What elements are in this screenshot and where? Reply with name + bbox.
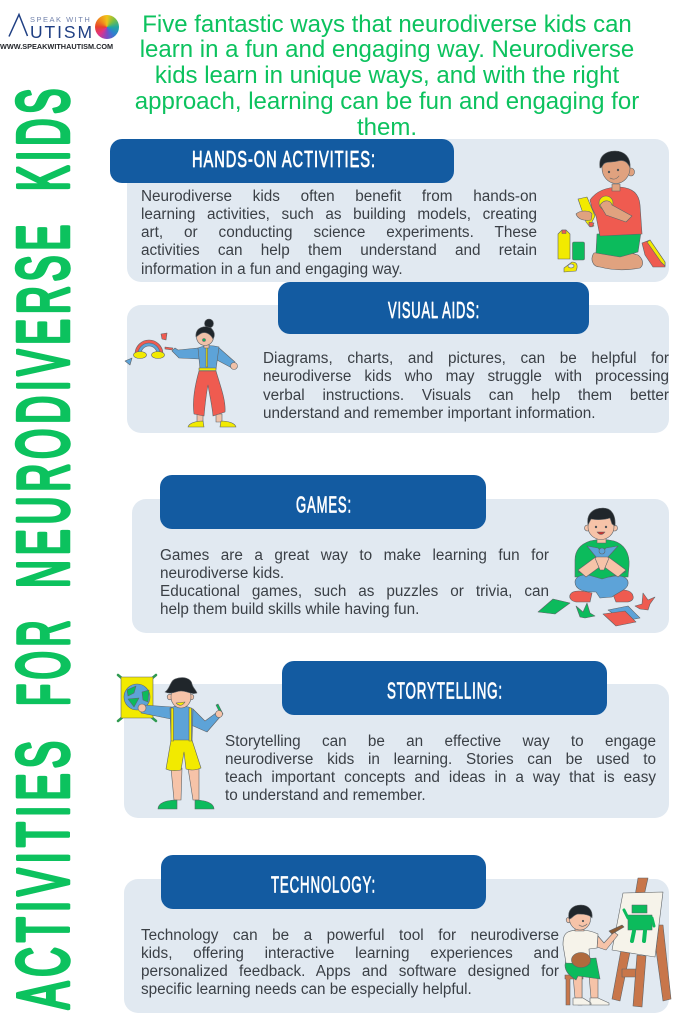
heading: visual aids: VISUAL AIDS: — [388, 297, 480, 323]
body text: specific learning needs can be especially helpful. — [141, 981, 472, 998]
panel background — [127, 139, 669, 282]
logo text: utism: UTISM — [30, 22, 94, 42]
body text: kids, offering interactive learning experiences and — [141, 945, 559, 962]
panel background — [127, 305, 669, 433]
logo: Speak With Autism — [0, 12, 119, 51]
body text: neurodiverse kids. — [160, 565, 284, 582]
logo text: speak with: SPEAK WITH — [30, 15, 91, 24]
body text — [141, 188, 537, 278]
body text: Games are a great way to make learning fun for — [160, 546, 549, 564]
intro text: approach, learning can be fun and engaging for — [135, 88, 639, 115]
body text: neurodiverse kids who may struggle with processing — [263, 368, 669, 385]
icon: boy folding origami — [538, 508, 656, 626]
body text — [160, 546, 549, 618]
intro text: kids learn in unique ways, and with the right — [155, 62, 619, 89]
intro text: Five fantastic ways that neurodiverse kids can — [142, 10, 632, 38]
vertical title — [4, 84, 84, 1010]
body text: verbal instructions. Visuals can help them better — [263, 386, 669, 404]
heading: technology: TECHNOLOGY: — [271, 872, 376, 898]
heading: visual aids — [278, 282, 589, 334]
body text: Educational games, such as puzzles or trivia, can — [160, 583, 549, 600]
panel: storytelling — [116, 661, 669, 818]
body text: to understand and remember. — [225, 787, 426, 804]
body text — [141, 926, 559, 998]
panel background — [132, 499, 669, 633]
body text: Technology can be a powerful tool for neurodiverse — [141, 926, 559, 944]
vertical title: FOR — [4, 616, 84, 706]
body text — [225, 732, 656, 804]
panel: visual aids — [124, 282, 669, 433]
heading: storytelling: STORYTELLING: — [387, 678, 503, 704]
body text: Storytelling can be an effective way to engage — [225, 732, 656, 750]
body text: personalized feedback. Apps and software designed for — [141, 963, 559, 980]
heading: hands-on activities — [110, 139, 454, 183]
body text — [263, 350, 669, 422]
icon: boy painting robot on easel — [562, 878, 672, 1008]
heading: storytelling — [282, 661, 607, 715]
body text: activities can help them understand and retain — [141, 242, 537, 259]
icon: girl with rainbow — [124, 318, 238, 428]
panel background — [124, 879, 669, 1013]
heading: games — [160, 475, 486, 529]
body text: understand and remember important information. — [263, 405, 595, 422]
body text: learning activities, such as building models, creating — [141, 206, 537, 223]
body text: Neurodiverse kids often benefit from hands-on — [141, 188, 537, 204]
icon: boy with globe poster — [116, 674, 224, 810]
icon: rainbow badge — [95, 15, 119, 39]
icon: boy with glue bottle — [558, 150, 666, 272]
icon: logo letter A — [8, 12, 28, 37]
body text: art, or conducting science experiments. These — [141, 224, 537, 241]
logo url: WWW.SPEAKWITHAUTISM.COM — [0, 42, 113, 51]
body text: help them build skills while having fun. — [160, 601, 419, 618]
panel: games — [132, 475, 669, 633]
body text: information in a fun and engaging way. — [141, 260, 403, 278]
heading: technology — [161, 855, 486, 909]
panel background — [124, 684, 669, 818]
intro text: learn in a fun and engaging way. Neurodiverse — [140, 36, 634, 63]
body text: neurodiverse kids in learning. Stories can be used to — [225, 751, 656, 768]
panel: hands-on activities — [110, 139, 669, 282]
vertical title: ACTIVITIES — [4, 736, 84, 1009]
body text: teach important concepts and ideas in a way that is easy — [225, 769, 656, 786]
panel: technology — [124, 855, 672, 1013]
body text: Diagrams, charts, and pictures, can be helpful for — [263, 350, 669, 367]
heading: games: GAMES: — [296, 492, 352, 518]
intro text: them. — [357, 114, 417, 141]
intro text — [135, 10, 639, 141]
